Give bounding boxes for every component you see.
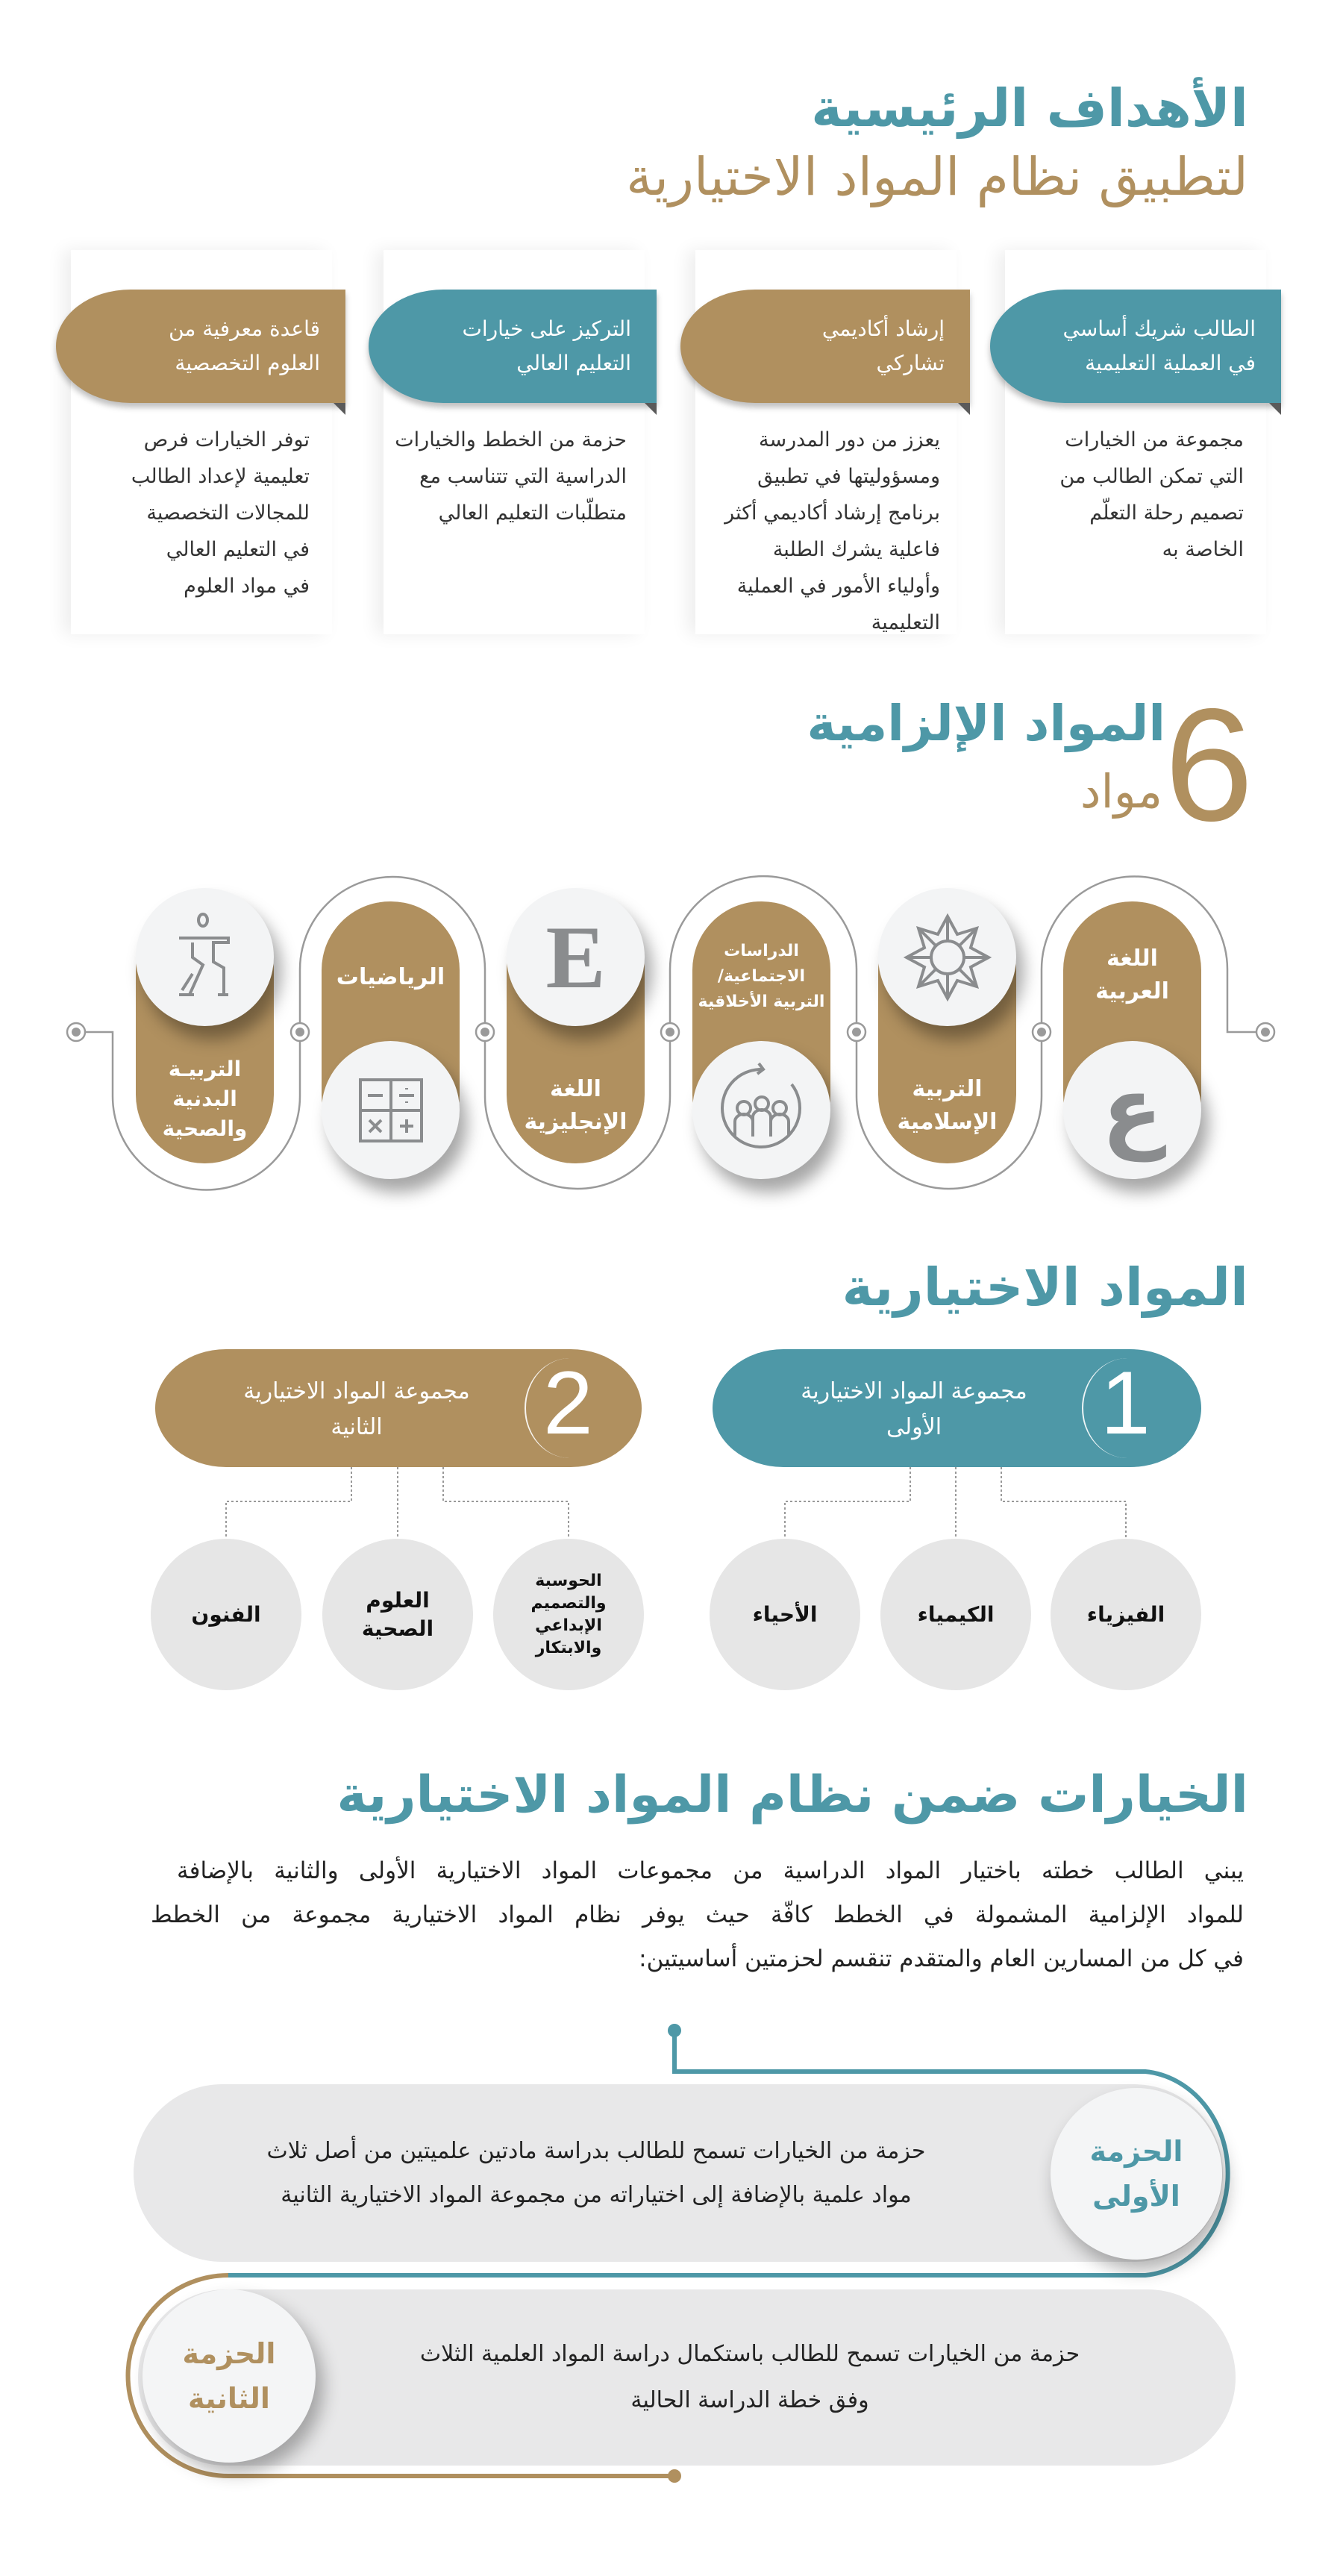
group 2 label xyxy=(243,1378,470,1440)
icon: letter E: E xyxy=(545,907,606,1006)
item: physical education: البدنية xyxy=(172,1087,237,1111)
group number 2: 2 xyxy=(543,1353,593,1453)
card 1 header xyxy=(990,290,1281,403)
item: Islamic education xyxy=(878,901,1016,1163)
card 1 body: مجموعة من الخيارات xyxy=(1065,428,1244,451)
card 2 header: إرشاد أكاديمي xyxy=(822,316,945,341)
card 4 header: قاعدة معرفية من xyxy=(169,316,320,341)
icon: islamic star xyxy=(878,888,1016,1026)
title: compulsory subjects xyxy=(807,675,1253,854)
first package text: حزمة من الخيارات تسمح للطالب بدراسة مادتين علميتين من أصل ثلاث xyxy=(267,2138,925,2164)
chain: compulsory subjects xyxy=(66,875,1276,1202)
subject: physics xyxy=(1051,1539,1201,1690)
icon: calculator xyxy=(322,1041,460,1179)
card 2 body: ومسؤوليتها في تطبيق xyxy=(757,465,940,488)
card 3 body: متطلّبات التعليم العالي xyxy=(439,501,627,525)
item: Islamic education: الإسلامية xyxy=(898,1109,997,1135)
subject: chemistry xyxy=(880,1539,1031,1690)
card 1 body: الخاصة به xyxy=(1162,538,1244,561)
card 4 body: في التعليم العالي xyxy=(166,538,310,561)
item: physical education: التربيـة xyxy=(169,1057,241,1081)
text block: intro paragraph xyxy=(151,1857,1244,1972)
item: social studies: الدراسات xyxy=(724,942,799,960)
panel: second package xyxy=(138,2289,1236,2466)
item: mathematics xyxy=(322,901,460,1163)
second package text: حزمة من الخيارات تسمح للطالب باستكمال دراسة المواد العلمية الثلاث xyxy=(420,2341,1080,2367)
subject: computing & design: الإبداعي xyxy=(535,1616,602,1634)
card 4 body: في مواد العلوم xyxy=(184,575,310,598)
title: options within elective system: الخيارات ضمن نظام المواد الاختيارية xyxy=(337,1766,1248,1825)
heading text: المواد الإلزامية xyxy=(807,695,1165,752)
item: Arabic language xyxy=(1063,901,1201,1163)
card 3 header: التعليم العالي xyxy=(516,351,631,375)
title: main goals xyxy=(626,77,1248,207)
item: social studies: التربية الأخلاقية xyxy=(698,992,824,1011)
card 1 body: التي تمكن الطالب من xyxy=(1059,465,1244,488)
subheading: subjects: مواد xyxy=(1080,764,1162,819)
badge: first package: الحزمة xyxy=(1090,2135,1183,2168)
panel: first package xyxy=(134,2084,1223,2262)
item: social studies: الاجتماعية/ xyxy=(718,967,805,986)
card 4 body xyxy=(131,428,310,598)
card 3 header xyxy=(369,290,657,403)
panel: elective group 2 xyxy=(155,1349,642,1467)
badge: first package: الأولى xyxy=(1092,2180,1180,2213)
card 2 body: وأولياء الأمور في العملية xyxy=(737,575,940,598)
panel: card 3 xyxy=(366,252,660,631)
group 2 label: الثانية xyxy=(331,1414,383,1440)
subject: chemistry: الكيمياء xyxy=(918,1601,994,1627)
text block: intro paragraph: في كل من المسارين العام والمتقدم تنقسم لحزمتين أساسيتين: xyxy=(639,1945,1244,1972)
first package text xyxy=(267,2136,925,2208)
group number 1: 1 xyxy=(1101,1353,1151,1453)
subject: arts xyxy=(151,1539,301,1690)
text block: intro paragraph: يبني الطالب خطته باختيار المواد الدراسية من مجموعات المواد الاختيارية الأولى والثانية بالإضافة xyxy=(177,1857,1244,1884)
second package text xyxy=(420,2341,1080,2413)
badge: second package xyxy=(143,2289,316,2463)
title: main goals: الأهداف الرئيسية xyxy=(811,78,1248,139)
title: elective subjects: المواد الاختيارية xyxy=(842,1257,1248,1318)
group 1 label: الأولى xyxy=(886,1414,942,1440)
subject: computing & design: الحوسبة xyxy=(535,1572,602,1589)
card 2 body: فاعلية يشرك الطلبة xyxy=(773,538,940,561)
card 3 header: التركيز على خيارات xyxy=(462,316,631,341)
subject: health sciences: الصحية xyxy=(362,1616,433,1640)
item: English language xyxy=(507,901,645,1163)
badge: second package: الثانية xyxy=(188,2382,270,2415)
card 4 header xyxy=(56,290,345,403)
icon: Arabic letter xyxy=(1063,1041,1201,1179)
card 4 header: العلوم التخصصية xyxy=(175,351,320,375)
badge: first package xyxy=(1051,2088,1222,2260)
item: English language: الإنجليزية xyxy=(524,1109,627,1135)
card 1 body xyxy=(1059,428,1244,561)
card 2 header: تشاركي xyxy=(876,351,945,375)
panel: card 1 xyxy=(986,252,1284,631)
card 2 body: التعليمية xyxy=(871,611,940,634)
item: English language: اللغة xyxy=(550,1076,601,1102)
subject: health sciences xyxy=(322,1539,473,1690)
big number 6: 6 xyxy=(1164,675,1253,854)
item: physical education: والصحية xyxy=(163,1116,247,1141)
subject: computing & design xyxy=(493,1539,644,1690)
icon: Arabic letter: ع xyxy=(1102,1058,1162,1161)
first package text: مواد علمية بالإضافة إلى اختياراته من مجموعة المواد الاختيارية الثانية xyxy=(281,2182,912,2208)
card 4 body: للمجالات التخصصية xyxy=(146,501,310,525)
connector: package lines xyxy=(125,2024,1230,2483)
badge: second package: الحزمة xyxy=(183,2337,275,2370)
group 1 label: مجموعة المواد الاختيارية xyxy=(801,1378,1027,1404)
subject: physics: الفيزياء xyxy=(1087,1601,1165,1627)
card 3 body xyxy=(395,428,627,525)
card 3 body: الدراسية التي تتناسب مع xyxy=(419,465,627,488)
text block: intro paragraph: للمواد الإلزامية المشمولة في الخطط كافّة حيث يوفر نظام المواد الاختيارية مجموعة من الخطط xyxy=(151,1901,1244,1928)
icon: fitness figure xyxy=(136,888,274,1026)
subject: health sciences: العلوم xyxy=(366,1588,430,1612)
icon: letter E xyxy=(507,888,645,1026)
card 1 body: تصميم رحلة التعلّم xyxy=(1089,501,1244,525)
panel: card 4 xyxy=(52,252,348,631)
card 2 body xyxy=(724,428,940,634)
item: mathematics: الرياضيات xyxy=(336,964,445,990)
subject: computing & design: والابتكار xyxy=(536,1639,601,1657)
card 4 body: توفر الخيارات فرص xyxy=(144,428,310,451)
card 2 header xyxy=(680,290,970,403)
subject: biology: الأحياء xyxy=(753,1601,817,1627)
subject: arts: الفنون xyxy=(191,1601,261,1627)
card 2 body: برنامج إرشاد أكاديمي أكثر xyxy=(724,501,940,525)
panel: elective group 1 xyxy=(713,1349,1201,1467)
icon: people xyxy=(692,1041,830,1179)
item: Arabic language: اللغة xyxy=(1106,945,1158,972)
connectors: dotted lines xyxy=(225,1467,1127,1537)
group 2 label: مجموعة المواد الاختيارية xyxy=(243,1378,470,1404)
subject: biology xyxy=(710,1539,860,1690)
title: main goals: لتطبيق نظام المواد الاختيارية xyxy=(626,146,1248,207)
item: social studies xyxy=(692,901,830,1163)
subject: computing & design: والتصميم xyxy=(530,1594,607,1612)
group 1 label xyxy=(801,1378,1027,1440)
card 2 body: يعزز من دور المدرسة xyxy=(759,428,940,451)
item: physical education xyxy=(136,901,274,1163)
second package text: وفق خطة الدراسة الحالية xyxy=(630,2387,869,2413)
item: Arabic language: العربية xyxy=(1095,978,1169,1004)
card 1 header: في العملية التعليمية xyxy=(1085,351,1256,375)
card 1 header: الطالب شريك أساسي xyxy=(1062,316,1256,341)
card 3 body: حزمة من الخطط والخيارات xyxy=(395,428,627,451)
panel: card 2 xyxy=(677,252,973,634)
item: Islamic education: التربية xyxy=(912,1076,983,1102)
card 4 body: تعليمية لإعداد الطالب xyxy=(131,465,310,488)
